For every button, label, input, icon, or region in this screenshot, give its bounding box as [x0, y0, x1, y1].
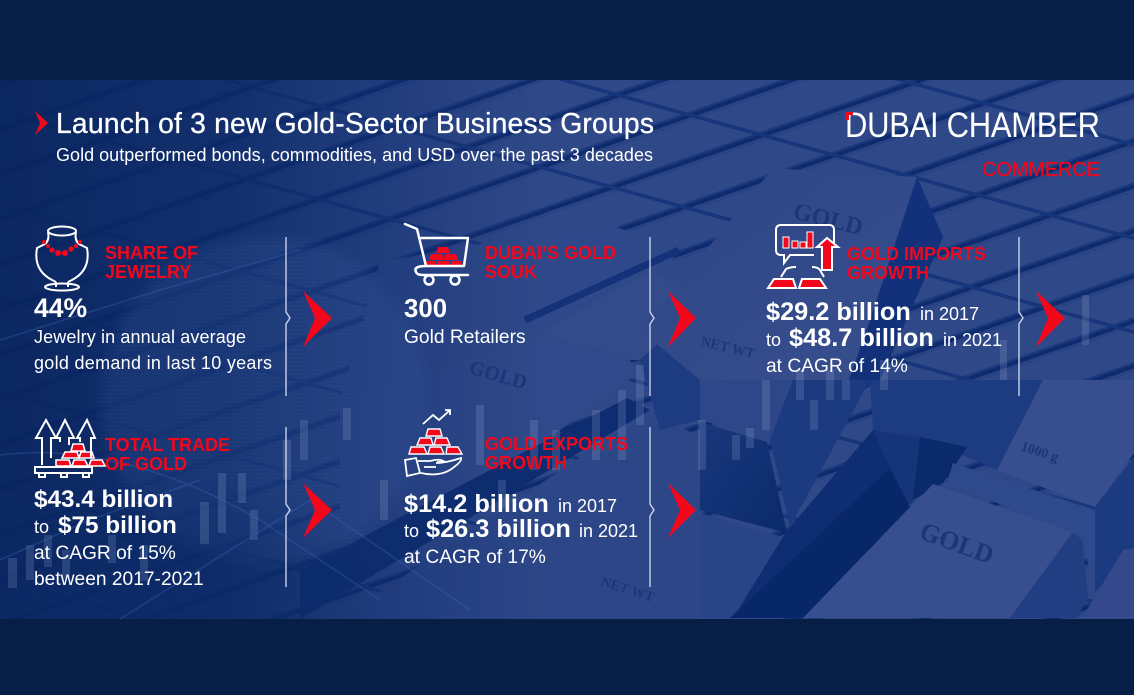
big upright bar: [640, 168, 943, 400]
stat line: $14.2 billion: [404, 490, 549, 518]
description: at CAGR of 17%: [404, 547, 546, 568]
stat line: in 2017: [558, 496, 617, 516]
background: trend lines: [0, 250, 470, 619]
background: globe: [0, 228, 437, 619]
lower block: [870, 380, 1043, 470]
logo: Dubai Chamber: DUBAI CHAMBER: [845, 106, 1100, 145]
panel: total trade of gold: [34, 420, 230, 590]
bar engravings: NET WT: [699, 334, 757, 362]
panel: gold imports growth: [766, 225, 1002, 377]
heading: GOLD EXPORTS: [485, 434, 628, 454]
stat line: in 2017: [920, 304, 979, 324]
stat line 2: to: [404, 521, 419, 541]
heading line 2: OF GOLD: [105, 454, 187, 474]
description line 2: gold demand in last 10 years: [34, 353, 272, 373]
heading line 2: JEWELRY: [105, 262, 191, 282]
heading line 2: GROWTH: [485, 453, 567, 473]
panel: gold exports growth: [404, 410, 638, 568]
divider and arrow: [650, 237, 696, 396]
bars mid-left: [340, 222, 677, 400]
heading: SHARE OF: [105, 243, 198, 263]
divider and arrow: [286, 237, 332, 396]
stat line 2: in 2021: [579, 521, 638, 541]
stat line 2: to: [34, 517, 49, 537]
stat: 44%: [34, 293, 87, 323]
panel: Dubai's gold souk: [404, 224, 616, 348]
bar engravings: 1000 g: [1019, 440, 1060, 466]
background: candlestick chart: [8, 295, 1089, 588]
icon: pallet of gold with arrows: [35, 420, 105, 477]
heading: TOTAL TRADE: [105, 435, 230, 455]
heading: GOLD IMPORTS: [847, 244, 986, 264]
icon: chart bubble and gold bars: [768, 225, 838, 288]
bar engravings: [467, 199, 1060, 606]
heading line 2: GROWTH: [847, 263, 929, 283]
bar engravings: GOLD: [791, 199, 865, 241]
icon: necklace bust: [36, 226, 88, 290]
description line 2: between 2017-2021: [34, 569, 204, 590]
label: commerce: COMMERCE: [982, 159, 1100, 181]
background photo: gold bars: [0, 80, 1134, 619]
title: Launch of 3 new Gold-Sector Business Groups: [56, 107, 654, 139]
stat line 2: $75 billion: [58, 512, 177, 539]
heading: DUBAI’S GOLD: [485, 243, 616, 263]
description: at CAGR of 15%: [34, 543, 176, 564]
divider and arrow: [650, 427, 696, 587]
description: Jewelry in annual average: [34, 327, 246, 347]
bar engravings: GOLD: [916, 516, 998, 570]
left darkening: [0, 80, 1134, 619]
stat line: $29.2 billion: [766, 298, 911, 326]
bar engravings: GOLD: [467, 357, 529, 394]
stat line 2: in 2021: [943, 330, 1002, 350]
divider and arrow: [1019, 237, 1065, 396]
bar engravings: NET WT: [599, 575, 656, 606]
title arrow: [35, 111, 48, 135]
stat line 2: $26.3 billion: [426, 515, 571, 543]
divider and arrow: [286, 427, 332, 587]
heading line 2: SOUK: [485, 262, 537, 282]
stat line 2: $48.7 billion: [789, 324, 934, 352]
subtitle: Gold outperformed bonds, commodities, and USD over the past 3 decades: [56, 145, 653, 165]
description: Gold Retailers: [404, 327, 526, 348]
panel: share of jewelry: [34, 226, 272, 373]
icon: shopping cart: [405, 224, 468, 284]
stat: $43.4 billion: [34, 486, 173, 513]
stat line 2: to: [766, 330, 781, 350]
stat: 300: [404, 295, 447, 323]
icon: hand holding gold: [405, 410, 462, 476]
description: at CAGR of 14%: [766, 356, 908, 377]
